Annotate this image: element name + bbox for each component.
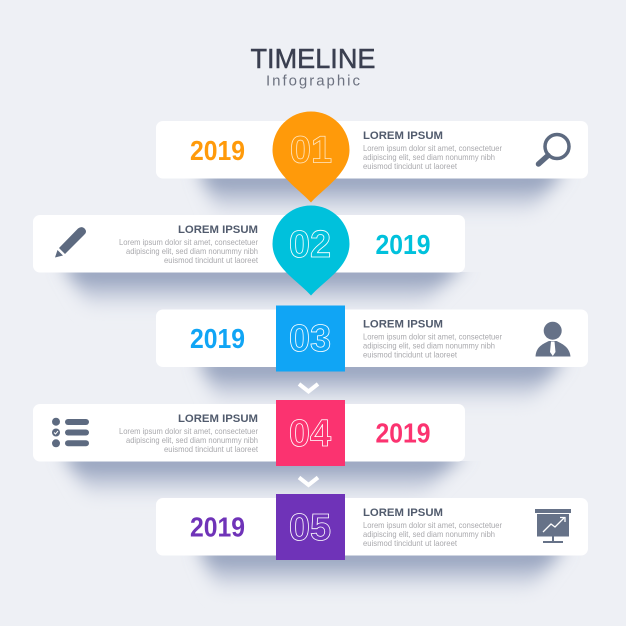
body text: Lorem ipsum dolor sit amet, consectetuer (363, 521, 502, 530)
arrow (299, 478, 318, 485)
panel: item 2 (33, 215, 465, 308)
year 2019 blue: 2019 (190, 323, 245, 354)
body text: adipiscing elit, sed diam nonummy nibh (363, 153, 495, 162)
pin 02 (272, 206, 350, 296)
title: TIMELINE (250, 43, 376, 74)
number 03: 03 (289, 318, 331, 360)
block 04 (276, 400, 345, 466)
block 03 (276, 306, 345, 372)
body text: euismod tincidunt ut laoreet (164, 445, 259, 454)
title: Infographic (266, 72, 360, 90)
number 01: 01 (290, 130, 332, 172)
year 2019 orange: 2019 (190, 135, 245, 166)
body text: Lorem ipsum dolor sit amet, consectetuer (119, 238, 258, 247)
panel: item 5 (156, 498, 588, 591)
heading: LOREM IPSUM (363, 507, 443, 519)
body text: adipiscing elit, sed diam nonummy nibh (363, 342, 495, 350)
heading: LOREM IPSUM (178, 224, 258, 236)
body text (119, 238, 259, 265)
year 2019 pink: 2019 (376, 418, 430, 448)
panel: item 4 (33, 404, 465, 497)
panel: item 1 (156, 121, 588, 214)
icon: businessman (536, 322, 570, 356)
body text: euismod tincidunt ut laoreet (363, 350, 458, 360)
body text (363, 144, 502, 171)
icon: presentation board (535, 509, 571, 543)
icon: magnifier (538, 134, 569, 164)
body text: adipiscing elit, sed diam nonummy nibh (363, 530, 495, 539)
heading: LOREM IPSUM (363, 130, 443, 142)
number 04: 04 (289, 413, 331, 455)
body text: Lorem ipsum dolor sit amet, consectetuer (363, 144, 502, 153)
body text: euismod tincidunt ut laoreet (363, 539, 458, 548)
icon: checklist (52, 418, 89, 447)
icon: pencil (55, 227, 86, 258)
body text (363, 521, 502, 548)
body text (119, 427, 259, 454)
number 02: 02 (289, 224, 331, 266)
body text: Lorem ipsum dolor sit amet, consectetuer (119, 427, 258, 436)
arrow (299, 384, 318, 392)
heading: LOREM IPSUM (178, 413, 258, 425)
body text (363, 332, 502, 360)
body text: adipiscing elit, sed diam nonummy nibh (126, 436, 258, 445)
number 05: 05 (289, 507, 331, 549)
title (250, 43, 376, 90)
panel: item 3 (156, 310, 588, 403)
body text: Lorem ipsum dolor sit amet, consectetuer (363, 332, 502, 342)
year 2019 teal: 2019 (376, 229, 430, 260)
body text: euismod tincidunt ut laoreet (164, 256, 259, 265)
block 05 (276, 494, 345, 560)
heading: LOREM IPSUM (363, 318, 443, 330)
body text: adipiscing elit, sed diam nonummy nibh (126, 247, 258, 256)
year 2019 purple: 2019 (190, 512, 245, 542)
body text: euismod tincidunt ut laoreet (363, 162, 458, 171)
pin 01 (272, 112, 350, 202)
